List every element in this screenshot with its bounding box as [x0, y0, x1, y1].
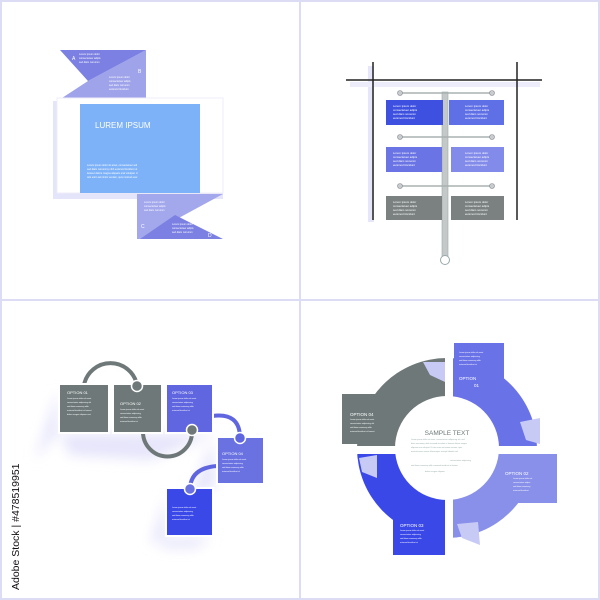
boxes: euismod tincidunt [465, 116, 487, 120]
square: option 04: sed diam nonummy nibh [222, 467, 244, 469]
top flag A/B [60, 50, 146, 98]
bottom flag C/D: D [208, 233, 212, 239]
option labels: OPTION [459, 376, 476, 381]
square: option 04 [217, 437, 264, 484]
option labels: OPTION 02 [505, 471, 529, 476]
boxes: consectetuer adipis [393, 204, 418, 208]
connectors [84, 363, 240, 490]
option labels: Lorem ipsum dolor sit amet [350, 418, 375, 421]
boxes: euismod tincidunt [393, 212, 415, 216]
square: option 04: OPTION 04 [222, 451, 244, 456]
square: option 05: sed diam nonummy nibh [172, 515, 194, 517]
top flag A/B: consectetuer adipis [109, 80, 131, 83]
option labels: 01 [474, 383, 480, 388]
option labels: euismod tincidunt ut [400, 541, 418, 544]
center text: diam nonummy nibh euismod tincidunt ut laoreet dolore magna [411, 442, 468, 445]
square: option 03: OPTION 03 [172, 390, 194, 395]
square: option 01: consectetuer adipiscing elit [67, 401, 91, 404]
option labels: consectetuer adipiscing [459, 355, 480, 358]
option labels: sed diam nonummy nibh [400, 538, 422, 540]
square: option 01: euismod tincidunt ut laoreet [67, 409, 92, 412]
bottom flag C/D [137, 194, 223, 239]
boxes: euismod tincidunt [465, 163, 487, 167]
square: option 03 [166, 384, 213, 433]
option labels: sed diam nonummy nibh [459, 360, 481, 362]
option labels: Lorem ipsum dolor sit amet [459, 351, 484, 354]
watermark text: Adobe Stock | #478519951 [10, 463, 22, 590]
square: option 01: Lorem ipsum dolor sit amet [67, 397, 92, 400]
top flag A/B: Lorem ipsum dolor [79, 53, 100, 56]
boxes: sed diam nonumm [465, 208, 489, 212]
bottom flag C/D: Lorem ipsum dolor [172, 223, 193, 226]
center text [411, 430, 471, 473]
top flag A/B: B [138, 69, 142, 75]
top flag A/B: sed diam nonumm [79, 61, 100, 64]
main frame [53, 98, 223, 199]
square: option 05: euismod tincidunt ut [172, 518, 190, 521]
top flag A/B: consectetuer adipis [79, 57, 101, 60]
boxes: euismod tincidunt [393, 163, 415, 167]
boxes: Lorem ipsum dolor [465, 104, 488, 108]
square: option 03: euismod tincidunt ut [172, 409, 190, 412]
quadrants [330, 330, 560, 560]
square: option 02: OPTION 02 [120, 401, 142, 406]
center text: dolore magna aliquam [425, 471, 445, 473]
boxes: sed diam nonumm [465, 112, 489, 116]
main frame: LUREM IPSUM [95, 121, 151, 130]
square: option 02: Lorem ipsum dolor sit amet [120, 408, 145, 411]
option labels: consectetuer adipis [513, 481, 530, 484]
boxes: consectetuer adipis [465, 108, 490, 112]
boxes: consectetuer adipis [393, 155, 418, 159]
square: option 02: euismod tincidunt ut [120, 420, 138, 423]
boxes: Lorem ipsum dolor [393, 151, 416, 155]
option labels: euismod tincidunt ut [459, 363, 477, 366]
page curls [359, 362, 540, 545]
main frame: laoreet dolore magna aliquam erat volutpat. U [87, 172, 138, 175]
top flag A/B: A [72, 56, 76, 62]
bottom flag C/D: consectetuer adipis [144, 205, 166, 208]
bottom flag C/D: sed diam nonumm [172, 231, 193, 234]
boxes: sed diam nonumm [393, 208, 417, 212]
pipe [398, 90, 494, 264]
square: option 04: Lorem ipsum dolor sit amet [222, 458, 247, 461]
option labels: OPTION 04 [350, 412, 374, 417]
boxes: sed diam nonumm [393, 159, 417, 163]
boxes: Lorem ipsum dolor [393, 104, 416, 108]
top flag A/B: Lorem ipsum dolor [109, 76, 130, 79]
option labels: OPTION 03 [400, 523, 424, 528]
square: option 03: sed diam nonummy nibh [172, 406, 194, 408]
bottom flag C/D: C [141, 224, 145, 230]
option labels: euismod tincidunt ut laoreet [350, 430, 375, 433]
boxes: sed diam nonumm [465, 159, 489, 163]
option labels [350, 351, 533, 544]
square: option 04: consectetuer adipiscing [222, 462, 243, 465]
bottom flag C/D: consectetuer adipis [172, 227, 194, 230]
top flag A/B: sed diam nonumm [109, 84, 130, 87]
square: option 04: euismod tincidunt ut [222, 470, 240, 473]
square: option 03: consectetuer adipiscing [172, 401, 193, 404]
option labels: consectetuer adipiscing elit [350, 422, 374, 425]
square: option 01: OPTION 01 [67, 390, 89, 395]
option labels: sed diam nonummy nibh [350, 427, 372, 429]
option labels: euismod tincidunt [513, 489, 529, 492]
square: option 05 [166, 488, 213, 536]
boxes: Lorem ipsum dolor [465, 200, 488, 204]
panel: puzzle steps [10, 363, 264, 590]
center text: consectetuer adipiscing [450, 459, 471, 462]
main frame: wisi enim ad minim veniam, quis nostrud exer [87, 176, 138, 179]
panel: circular options [330, 330, 560, 560]
square: option 02 [113, 384, 162, 433]
panel: ribbon banner [53, 50, 223, 239]
square: option 05: Lorem ipsum dolor sit amet [172, 506, 197, 509]
main frame: sed diam nonummy nibh euismod tincidunt ut [87, 168, 137, 171]
top flag A/B: euismod tincidunt [109, 88, 129, 91]
option labels: sed diam nonummy [513, 486, 530, 488]
center text: sed diam nonummy nibh euismod tincidunt ut laoreet [411, 464, 458, 467]
boxes: consectetuer adipis [465, 204, 490, 208]
square: option 01 [59, 384, 109, 433]
boxes [386, 100, 504, 220]
center text: nostrud exerci tation ullamcorper suscipit lobortis nisl [411, 450, 458, 453]
center text: aliquam erat volutpat. Ut wisi enim ad minim veniam, quis [411, 446, 462, 449]
option labels: Lorem ipsum dolor sit [513, 477, 533, 480]
panel: pipe tree [346, 62, 542, 264]
bottom flag C/D: Lorem ipsum dolor [144, 201, 165, 204]
center text: SAMPLE TEXT [425, 430, 469, 437]
square: option 01: dolore magna aliquam erat [67, 413, 91, 416]
boxes: consectetuer adipis [393, 108, 418, 112]
square: option 03: Lorem ipsum dolor sit amet [172, 397, 197, 400]
center text: Lorem ipsum dolor sit amet, consectetuer adipiscing elit, sed [411, 438, 465, 441]
boxes: Lorem ipsum dolor [465, 151, 488, 155]
square: option 02: sed diam nonummy nibh [120, 417, 142, 419]
option labels: Lorem ipsum dolor sit amet [400, 529, 425, 532]
boxes: consectetuer adipis [465, 155, 490, 159]
bottom flag C/D: sed diam nonumm [144, 209, 165, 212]
square: option 02: consectetuer adipiscing [120, 412, 141, 415]
boxes: euismod tincidunt [393, 116, 415, 120]
boxes: euismod tincidunt [465, 212, 487, 216]
square: option 01: sed diam nonummy nibh [67, 406, 89, 408]
square: option 05: consectetuer adipiscing [172, 510, 193, 513]
boxes: Lorem ipsum dolor [393, 200, 416, 204]
option labels: consectetuer adipiscing [400, 533, 421, 536]
main frame: Lorem ipsum dolor sit amet, consectetuer adi [87, 164, 137, 167]
boxes: sed diam nonumm [393, 112, 417, 116]
